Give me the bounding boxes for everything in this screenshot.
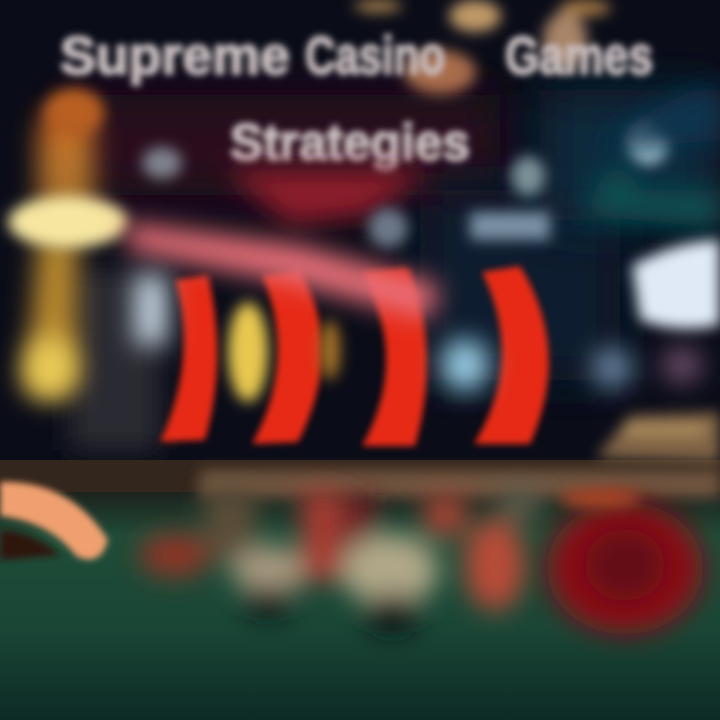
wooden table edge [0,460,720,498]
title: Supreme [60,26,290,86]
poker chips and figures [139,490,540,634]
title: Games [505,26,653,86]
title: Casino [305,26,445,86]
title: Strategies [230,114,470,172]
blue-white highlights [135,275,702,391]
top gold decoration [354,0,611,94]
title [60,26,653,172]
wooden object, lower right [596,412,720,462]
glowing cross, left [8,88,128,400]
peach curved shape, bottom left [0,482,108,560]
red chevron stripes [160,266,549,446]
yellow highlight between stripes [228,302,340,402]
white screen, right [632,240,720,329]
teal shape, upper right [585,85,720,228]
green felt table [0,490,720,720]
pink diagonal band [125,222,440,320]
red rose [547,488,703,634]
red subtitle glow [225,170,430,225]
small labels [142,125,668,248]
